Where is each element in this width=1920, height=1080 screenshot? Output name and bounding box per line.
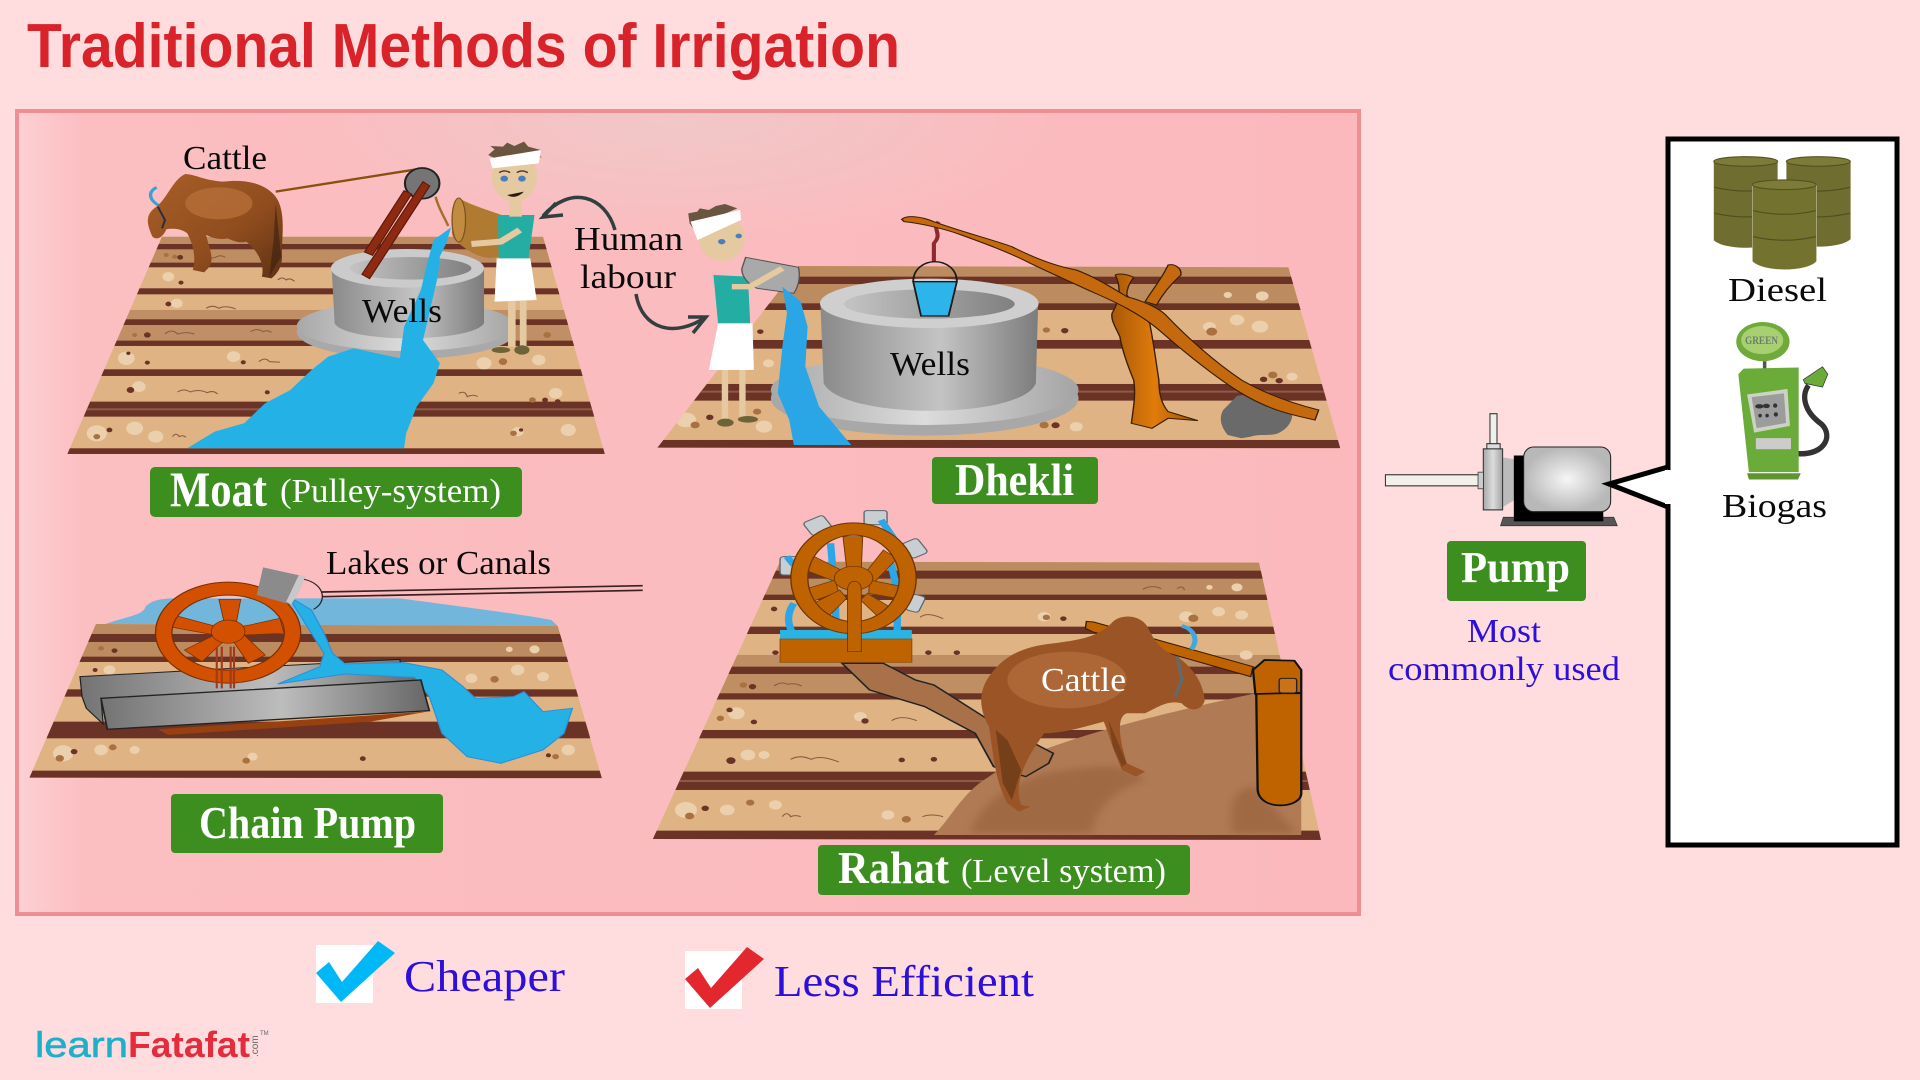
label: rahat [818,842,1190,895]
logo: learnfatafat: Fatafat [128,1024,250,1065]
icon: blue check [316,941,395,1003]
water body: lake [105,598,558,626]
field: rahat [640,560,1360,843]
label: cattle moat: Cattle [183,140,267,177]
text: less efficient: Less Efficient [774,957,1034,1006]
label: diesel: Diesel [1728,272,1827,309]
logo: learnfatafat: TM [260,1031,269,1037]
text: most commonly used: commonly used [1388,651,1620,688]
panel: power sources [1609,139,1897,845]
label: pump [1447,541,1586,601]
icon: farmer with bucket [452,142,542,355]
icon: red check [685,947,764,1009]
text: cheaper: Cheaper [404,952,565,1001]
icon: water stream [778,287,851,445]
logo: learnfatafat [35,1024,269,1065]
icon: biogas station [1736,322,1828,480]
icon: well [771,279,1079,436]
icon: trough front [101,680,429,735]
label: wells dhekli: Wells [890,346,970,383]
icon: biogas station: GREEN [1745,333,1778,347]
field: moat [42,237,631,457]
logo: learnfatafat: .com [250,1035,261,1057]
icon: belt to wheel [842,663,1053,777]
field: dhekli [640,265,1360,452]
label: moat: Moat [170,461,267,517]
label: chain pump: Chain Pump [199,797,416,848]
icon: chain wheel [164,589,293,688]
text: most commonly used: Most [1467,613,1542,650]
label: dhekli: Dhekli [955,454,1074,505]
icon: pulley and frame [276,168,448,279]
title: Traditional Methods of Irrigation [27,12,900,81]
label: rahat: Rahat [838,842,950,893]
barrel: back right [1786,157,1851,247]
icon: cow [981,616,1205,812]
icon: pump [1385,414,1617,526]
icon: water stream [187,227,451,448]
label: pump: Pump [1461,543,1570,592]
shadow under cow [934,693,1301,835]
label: lakes or canals: Lakes or Canals [326,545,551,582]
icon: bucket [913,222,957,316]
label: moat [150,461,522,517]
icon: trough back [80,659,423,724]
icon: farmer pouring water [688,204,799,427]
label: wells moat: Wells [362,293,442,330]
label: rahat: (Level system) [961,853,1166,890]
barrel: front [1752,180,1817,270]
label: human labour: labour [580,259,677,296]
icon: rope to lake [322,586,643,597]
icon: well [297,249,516,359]
arrow: human labour to farmer one [543,197,615,230]
icon: cow pulling rope [148,174,283,278]
scene: dhekli [640,204,1360,452]
label: human labour [574,221,683,296]
icon: diesel barrels [1714,157,1851,270]
panel: traditional methods [15,109,1361,916]
scene: moat pulley system [42,142,631,457]
icon: persian wheel [780,511,928,662]
label: biogas: Biogas [1722,488,1827,525]
label: moat: (Pulley-system) [280,473,501,510]
label: cattle rahat: Cattle [1041,662,1126,699]
barrel: back left [1714,157,1778,248]
label: human labour: Human [574,221,683,258]
icon: water flow [278,600,572,763]
field: chain pump [30,624,602,778]
icon: yoke [1085,621,1253,677]
arrow: human labour to farmer two [636,294,706,333]
text: most commonly used [1388,613,1620,688]
icon: dhekli lever and post [902,217,1319,438]
icon: post [1253,660,1301,805]
scene: rahat [640,511,1360,843]
logo: learnfatafat: learn [35,1024,128,1065]
icon: bucket and handle [257,567,322,609]
scene: chain pump [0,567,660,780]
